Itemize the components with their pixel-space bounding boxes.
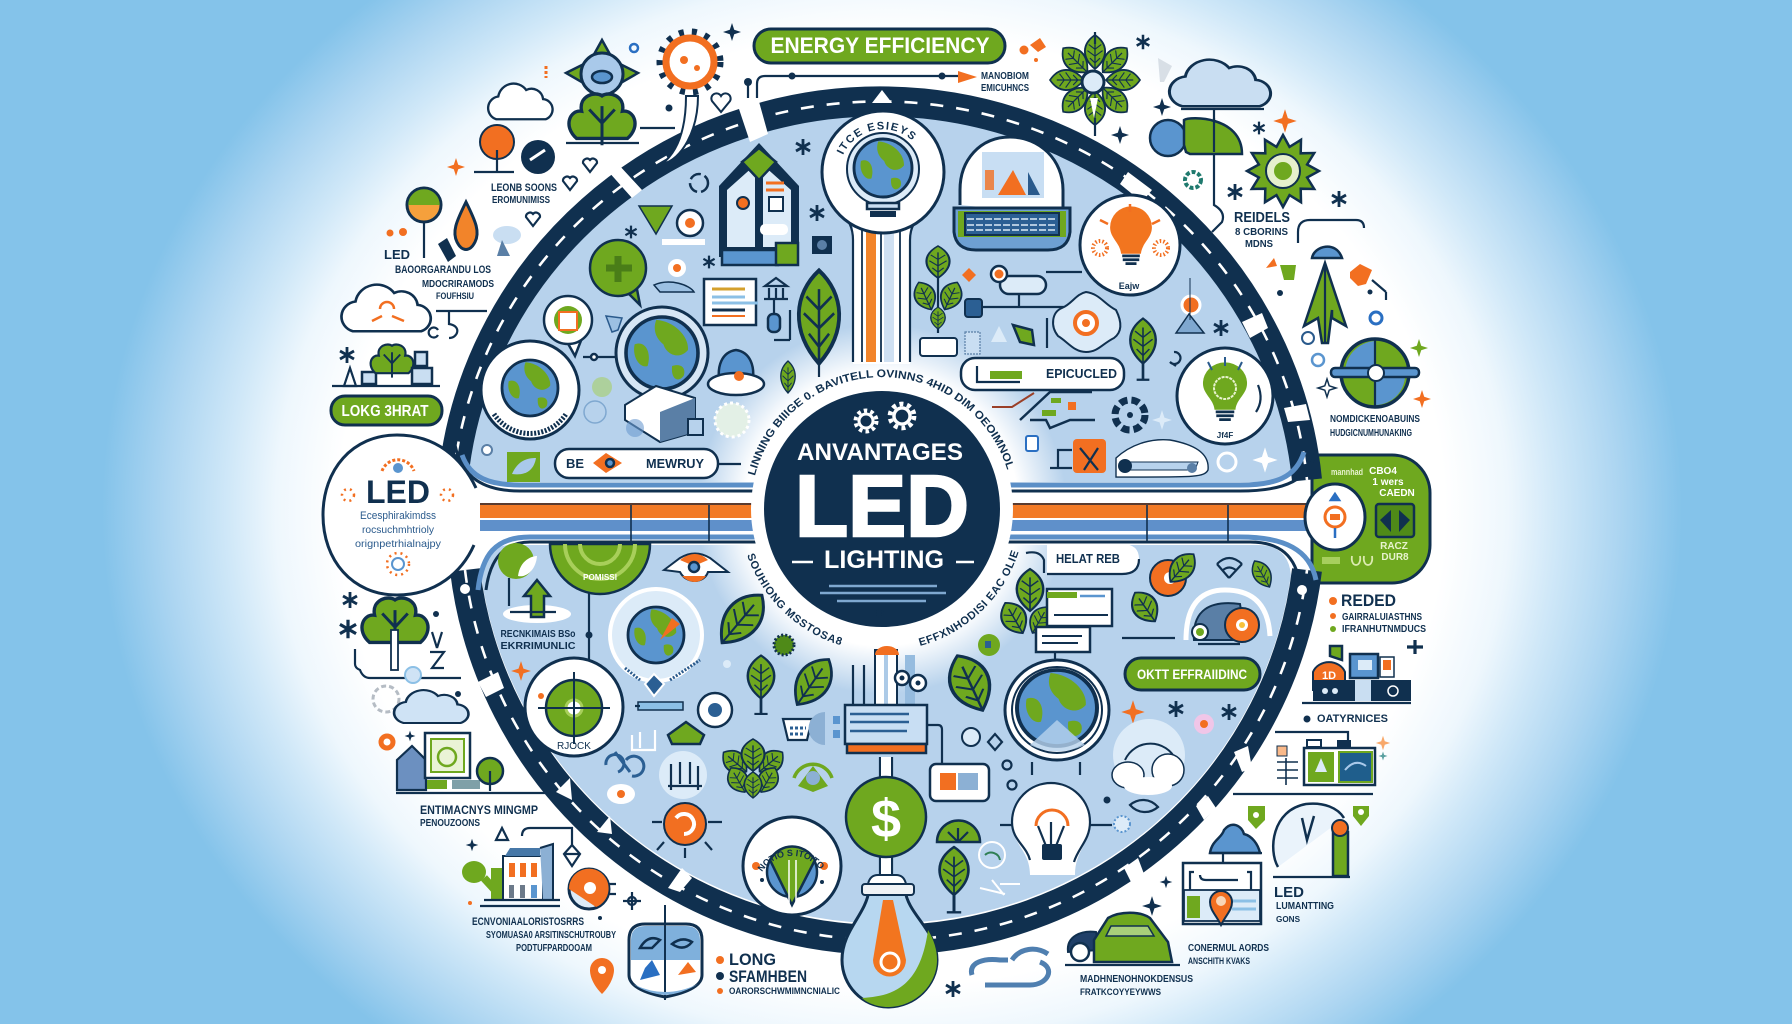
label: recommaris: RECNKIMAIS BSo <box>500 628 576 640</box>
panel: right green legend card: 1 wers <box>1372 477 1404 488</box>
label: crosshair text: NOMDICKENOABUINS <box>1330 414 1420 425</box>
label: consumer <box>1188 942 1269 967</box>
connector from sun into road <box>662 96 698 164</box>
icon: dollar circle: $ <box>871 789 901 849</box>
icon: target circle <box>525 658 623 756</box>
icon: A glyph marker <box>430 632 444 668</box>
icon: clock <box>1273 804 1350 877</box>
icon: cloud left lower <box>373 686 468 723</box>
label: environmental: PODTUFPARDOOAM <box>516 943 592 954</box>
panel: upper half of the circle <box>469 115 1291 482</box>
icon: plant <box>717 739 789 798</box>
icons: eye and flower <box>1104 796 1158 832</box>
label: LED lumanting: LUMANTTING <box>1276 900 1334 912</box>
icon: eye diamond <box>566 40 638 95</box>
label: environmental <box>472 916 616 954</box>
icon: cloud top left <box>488 84 553 119</box>
icon: blue cloud <box>1210 825 1262 862</box>
icon: small ring <box>630 44 638 52</box>
icon: eye capsule <box>664 554 728 582</box>
icons: ring and star <box>1218 447 1278 473</box>
icon: shield <box>606 316 622 332</box>
icon: orange with leaf <box>1125 547 1202 628</box>
label: reidels: 8 CBORINS <box>1235 226 1288 238</box>
icon: orange marker <box>544 66 548 78</box>
icon: leaf circle <box>498 543 537 606</box>
icon: green star flower <box>1247 135 1319 207</box>
label: entimacnys: ENTIMACNYS MINGMP <box>420 805 538 817</box>
icon: green burst and ring <box>635 635 794 710</box>
vertical connector <box>586 592 592 660</box>
icon: orange sunburst <box>652 803 722 858</box>
title pill: energy efficiency <box>754 29 1005 63</box>
icon: green house shape <box>632 722 704 750</box>
pill: helat reb: HELAT REB <box>1056 552 1120 566</box>
icon: leaf tree mid right <box>1130 318 1156 380</box>
icons: sparks near cloud <box>1121 700 1236 734</box>
icon: green speech bubble <box>590 240 646 305</box>
pill: be memory: MEWRUY <box>646 456 704 471</box>
connector with hook <box>429 311 487 338</box>
label: LED small: LED <box>384 247 410 262</box>
icons: snow flakes and spiral in upper panel <box>625 139 832 268</box>
top globe lamp with tube <box>820 112 946 364</box>
icon: building <box>462 828 572 906</box>
icon: gears <box>856 404 914 432</box>
icon: target circle: RJOCK <box>557 741 591 752</box>
pill: okt efficiency <box>1125 658 1260 690</box>
label: reded: REDED <box>1341 591 1396 610</box>
icon: bulb circle right <box>1177 348 1273 444</box>
icons: sparks around crosshair <box>1318 339 1431 408</box>
panel: LED summary circle: Ecesphirakimdss <box>360 510 436 522</box>
label: consumer: CONERMUL AORDS <box>1188 942 1269 954</box>
icon: sparkle top <box>723 23 741 41</box>
icons: teal ring and flakes <box>1185 172 1346 207</box>
icon: green half disc: POMISSI <box>583 573 617 582</box>
title pill: energy efficiency: ENERGY EFFICIENCY <box>770 33 990 58</box>
icon: dollar circle <box>846 777 926 857</box>
icons: wifi and leaf <box>1217 557 1277 591</box>
icon: monitors with connector <box>1233 732 1375 794</box>
label: recommaris <box>500 628 576 652</box>
pill: be memory: BE <box>566 456 584 471</box>
label: environmental: ECNVONIAALORISTOSRRS <box>472 916 584 928</box>
curved caption lower left: SOUHIONG MSSTOSA8 <box>748 554 842 645</box>
icon: big white bulb <box>1000 783 1112 875</box>
icon: crosshair globe <box>1331 339 1419 407</box>
label: top right of title: EMICUHNCS <box>981 83 1029 94</box>
icon: helmet on cloud <box>708 350 764 395</box>
label: maintenance: MADHNENOHNOKDENSUS <box>1080 973 1193 985</box>
label: reded <box>1329 591 1426 635</box>
label: reidels: REIDELS <box>1234 209 1290 226</box>
icon: cloud with ring <box>341 285 431 331</box>
icon: dot and heart <box>666 93 731 112</box>
icons: small symbols <box>962 728 1016 790</box>
icon: orange pin <box>590 958 614 994</box>
icon: globe in halo <box>610 589 702 681</box>
pill: be memory <box>555 449 741 478</box>
horizontal band with coloured strips <box>455 445 1316 590</box>
icon: orange compass <box>569 869 616 909</box>
connector line under title <box>744 71 977 98</box>
icon: wheel and star <box>1115 400 1172 430</box>
icons: diamonds <box>1253 109 1297 134</box>
pill: epicucled <box>961 358 1124 390</box>
icon: angled leaf <box>784 651 842 713</box>
icon: blob with ring <box>1053 292 1120 352</box>
label: long samhben <box>716 950 840 996</box>
icon: bulb circle right: Jf4F <box>1217 431 1233 440</box>
icon: tree lower <box>748 656 774 714</box>
icon: orange star <box>511 661 531 681</box>
icons: flakes and tree left outer <box>340 592 439 638</box>
icon: small leaf <box>781 361 795 393</box>
pill: helat reb <box>1026 544 1139 574</box>
icons: small card and grid <box>920 318 1047 356</box>
icon: orange sun and triangle <box>1170 278 1228 366</box>
label: top right of title: MANOBIOM <box>981 71 1029 82</box>
label: environmental: SYOMUASA0 ARSITINSCHUTROUBY <box>486 930 616 941</box>
label: baoorgarandu: FOUFHSIU <box>436 291 474 301</box>
icon: bushy tree <box>362 598 428 670</box>
icon: globe circle badge <box>481 341 579 439</box>
icon: swirl <box>405 667 421 683</box>
ring road: upper arc <box>453 101 1307 480</box>
icons: triangle and flake <box>466 828 508 851</box>
label: baoorgarandu <box>395 264 494 301</box>
badge title line 3: LIGHTING <box>824 546 944 574</box>
pill: okt efficiency: OKTT EFFRAIIDINC <box>1137 666 1247 682</box>
icon: small pin <box>654 259 694 292</box>
label: consumer: ANSCHITH KVAKS <box>1188 956 1250 967</box>
curved caption lower right: EFFXNHODISI EAC OLIE <box>918 550 1018 646</box>
pill: long heat: LOKG 3HRAT <box>342 403 429 420</box>
icon: green flower <box>1050 32 1140 136</box>
icon: orange bulb circle: Eajw <box>1119 281 1140 291</box>
connector top right <box>1212 110 1223 232</box>
road gaps and markers <box>478 90 1310 892</box>
icon: document <box>704 279 758 325</box>
icon: gauge <box>698 693 732 727</box>
glow around the central badge <box>697 324 1067 694</box>
icon: connector from equipment <box>928 725 942 764</box>
icon: basket <box>783 712 840 745</box>
icon: car pill <box>1116 440 1208 477</box>
connector reidels <box>1298 220 1364 243</box>
panel: right green legend card <box>1312 455 1430 583</box>
icon: arch and lock <box>764 278 790 340</box>
icons: faint marks <box>979 842 1020 895</box>
icon: bush <box>566 94 675 145</box>
label: leonb soons <box>491 182 557 206</box>
label: reidels <box>1234 209 1290 250</box>
node pill connector <box>962 266 1082 317</box>
badge decorative lines <box>820 586 946 601</box>
icon: box with orange pin <box>1183 863 1261 925</box>
icon: orange bulb circle <box>1080 195 1180 295</box>
panel: right green legend card: DUR8 <box>1381 552 1409 563</box>
icon: cluster of devices: 1D <box>1322 670 1336 682</box>
icon: green car <box>1065 913 1180 965</box>
icon: chat cluster <box>992 392 1095 428</box>
label: LED lumanting: GONS <box>1276 914 1300 924</box>
icon: large leaf lower <box>940 648 1000 718</box>
label: long samhben: SFAMHBEN <box>729 967 807 986</box>
icon: flame drop <box>455 202 477 250</box>
icon: tree lower right <box>940 847 968 912</box>
icons: pine accents <box>1266 258 1386 366</box>
pill: epicucled: EPICUCLED <box>1046 366 1117 381</box>
icon: shield panel <box>629 905 702 1000</box>
icon: dome house <box>719 143 799 265</box>
icon: orange plus <box>447 158 465 176</box>
icon: navy disc <box>521 140 555 174</box>
panel: LED summary circle <box>323 435 480 595</box>
label: maintenance <box>1080 973 1193 998</box>
panel: LED summary circle: rocsuchmhtrioly <box>362 524 435 536</box>
label: entimacnys: PENOUZOONS <box>420 818 480 829</box>
panel: lower half of the circle <box>481 545 1291 923</box>
label: long samhben: OARORSCHWMIMNCNIALIC <box>729 986 840 996</box>
label: baoorgarandu: MDOCRIRAMODS <box>422 279 494 290</box>
label: baoorgarandu: BAOORGARANDU LOS <box>395 264 491 276</box>
icon: tree circle <box>742 816 842 916</box>
panel: LED summary circle: LED <box>366 474 430 510</box>
panel: right green legend card: CBO4 <box>1369 466 1397 477</box>
icon: big leaf tree <box>799 270 839 377</box>
label: crosshair text: HUDGICNUMHUNAKING <box>1330 428 1412 439</box>
icon: chain <box>971 949 1049 985</box>
panel: right green legend card: mannhad <box>1331 467 1363 477</box>
panel: right green legend card: RACZ <box>1380 541 1408 552</box>
icon: lamp <box>386 188 441 258</box>
central badge <box>751 378 1013 640</box>
panel: right green legend card: CAEDN <box>1379 488 1415 499</box>
icon: sprig tree <box>910 246 966 333</box>
lower equipment connector <box>845 646 927 878</box>
icons: sparks near flower <box>1020 35 1172 144</box>
icon: laptop <box>954 137 1070 250</box>
icon: sun <box>660 32 720 92</box>
icon: orange lollipop <box>474 125 514 172</box>
icon: dial and green dome <box>1150 118 1242 156</box>
icon: orange X card <box>1050 439 1106 473</box>
icon: house with monitor <box>396 731 545 793</box>
label: leonb soons: EROMUNIMISS <box>492 195 550 206</box>
label: reidels: MDNS <box>1245 239 1273 250</box>
curved caption above the badge: LINNING BIIIGE 0. BAVITELL OVINNS 4HID DIM OEOIMNOL <box>748 369 1013 476</box>
icon: funnel with lamp <box>639 206 705 242</box>
icon: leaf card <box>507 452 540 482</box>
pill: long heat <box>331 396 442 425</box>
icons: small hearts <box>526 159 597 226</box>
icon: arch green <box>794 764 832 792</box>
label: LED lumanting <box>1274 884 1334 924</box>
icon: large globe with stand <box>583 307 708 442</box>
icon: base bulb <box>842 875 937 1007</box>
badge small mark <box>875 608 883 618</box>
ring road: lower arc <box>460 570 1307 940</box>
label: entimacnys <box>420 805 538 829</box>
icon: cluster of devices <box>1302 646 1411 703</box>
icon: earth in frame <box>1005 652 1109 775</box>
icon: pen and smoke <box>438 226 521 262</box>
icons: pale sprigs <box>482 377 749 455</box>
badge title LED: LED <box>795 458 969 555</box>
label: reded: GAIRRALUIASTHNS <box>1342 612 1422 623</box>
label: top right of title <box>981 71 1029 94</box>
icons: gem and cross <box>468 845 641 920</box>
panel: LED summary circle: orignpetrhialnajpy <box>355 538 442 550</box>
icons: sparks near car <box>946 876 1172 997</box>
label: crosshair text <box>1330 414 1420 439</box>
icon: white plant tool <box>659 751 707 799</box>
label: oatyrnices: OATYRNICES <box>1317 713 1388 725</box>
icon: small speech circle <box>544 296 592 356</box>
icon: up arrow on cloud <box>503 580 571 623</box>
icons: shields <box>1248 806 1369 829</box>
icon: plus <box>1407 640 1423 654</box>
icon: leaves with documents <box>995 569 1112 652</box>
icon: cloud top right <box>1169 60 1271 109</box>
icon: green dome <box>937 821 980 842</box>
icon: knots <box>606 752 644 804</box>
arc label on lamp: ITCE ESIEYS <box>836 122 916 154</box>
label: maintenance: FRATKCOYYEYWWS <box>1080 987 1161 998</box>
badge title line 1: ANVANTAGES <box>797 439 963 466</box>
icon: orange ring <box>381 736 393 748</box>
label: reded: IFRANHUTNMDUCS <box>1342 624 1426 635</box>
icon: small tree scene <box>332 344 440 386</box>
label: leonb soons: LEONB SOONS <box>491 182 557 194</box>
label: recommaris: EKRRIMUNLIC <box>500 640 576 652</box>
icon: green ball <box>978 634 1000 656</box>
icon: green half disc <box>550 544 650 594</box>
icon: pine tree with cloud <box>1304 247 1346 343</box>
icons: sparks right <box>1376 736 1390 760</box>
label: long samhben: LONG <box>729 950 776 969</box>
icon: leaf lower <box>709 584 775 654</box>
icon: tree circle: NOTIO S ITOITO <box>758 850 824 872</box>
panel: circle icon on the green card <box>1305 484 1365 550</box>
icon: small card <box>930 764 989 801</box>
label: LED lumanting: LED <box>1274 884 1304 901</box>
connector left lower <box>355 649 461 678</box>
icons: blue square <box>1026 436 1038 451</box>
icon: white clouds <box>1112 719 1185 795</box>
icon: orange gadget <box>1122 590 1270 644</box>
